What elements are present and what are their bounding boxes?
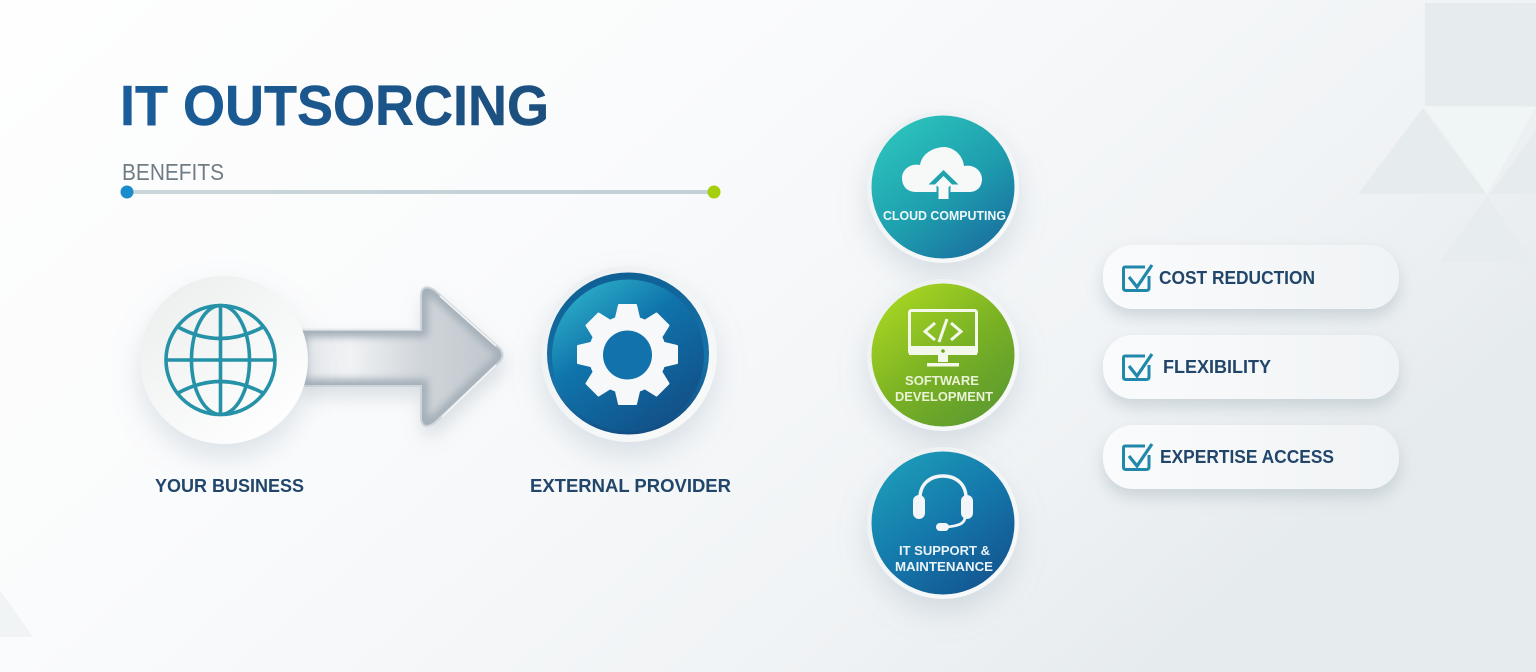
service: cloud computing [867,111,1019,263]
icon: gear [578,305,677,404]
service: software development [867,279,1019,431]
label: external provider: EXTERNAL PROVIDER [530,475,731,496]
service: software development: DEVELOPMENT [895,389,993,404]
benefit: flexibility: FLEXIBILITY [1163,357,1271,377]
benefit: expertise access: EXPERTISE ACCESS [1160,447,1334,467]
service: cloud computing: CLOUD COMPUTING [883,209,1006,223]
icon: headset [913,476,973,531]
icon: monitor with code [909,310,977,366]
arrow [300,288,502,425]
benefit: expertise access [1103,425,1399,489]
benefit: cost reduction: COST REDUCTION [1159,268,1315,288]
divider line with end dots [120,186,720,198]
icon: checkbox [1124,354,1152,380]
title: IT OUTSORCING [120,74,549,138]
external provider disc [541,266,717,442]
service: it support and maintenance [867,447,1019,599]
subtitle: benefits: BENEFITS [122,159,224,185]
icon: cloud upload [902,147,982,199]
service: it support and maintenance: IT SUPPORT & [899,543,990,558]
icon: checkbox [1124,444,1152,470]
your business disc [140,276,308,444]
service: it support and maintenance: MAINTENANCE [895,559,993,574]
icon: checkbox [1124,265,1152,290]
label: your business: YOUR BUSINESS [155,475,304,496]
benefit: cost reduction [1103,245,1399,309]
benefit: flexibility [1103,335,1399,399]
service: software development: SOFTWARE [905,373,979,388]
icon: globe [166,305,275,415]
